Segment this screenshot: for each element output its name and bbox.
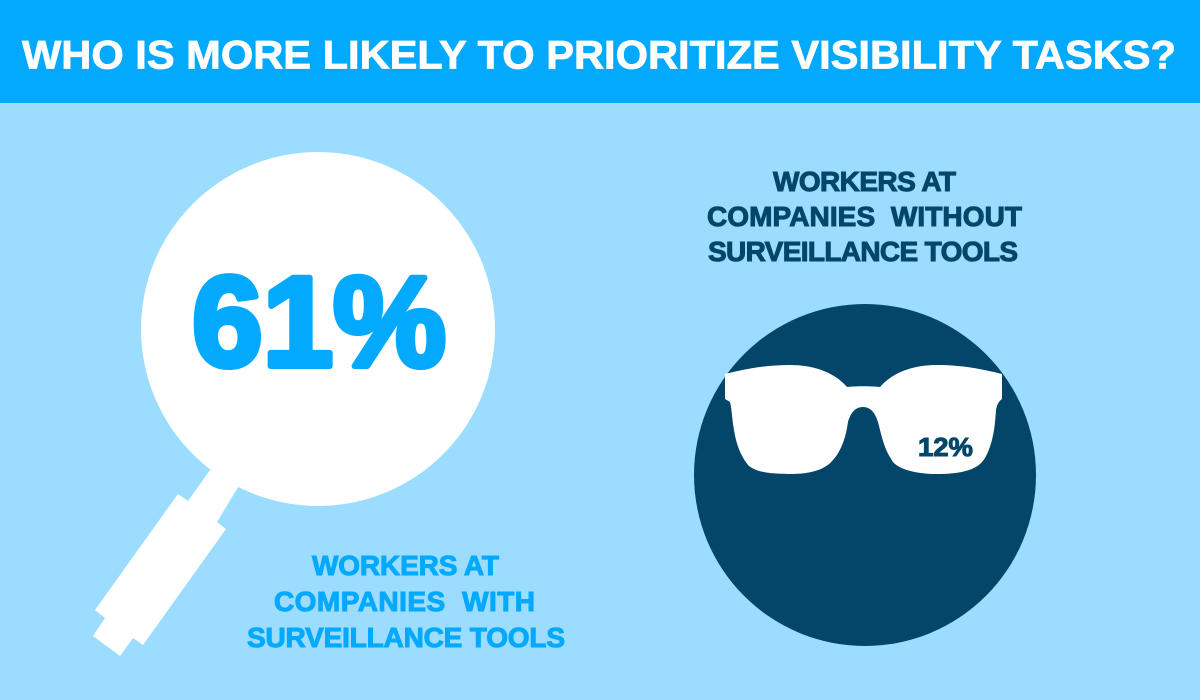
panel: workers without surveillance tools [694, 166, 1036, 646]
label: companies with surveillance tools: SURVEILLANCE TOOLS [247, 622, 565, 653]
statistic: 12%: 12% [918, 432, 973, 462]
header banner [0, 0, 1200, 103]
label: companies with surveillance tools: COMPANIES WITH [274, 586, 535, 617]
label: companies with surveillance tools [247, 550, 565, 653]
dark circle [694, 304, 1036, 646]
icon: sunglasses [725, 365, 1002, 474]
icon: magnifying glass [93, 152, 495, 656]
statistic: 61%: 61% [192, 251, 446, 394]
panel: workers with surveillance tools [93, 152, 565, 656]
label: companies without surveillance tools: COMPANIES WITHOUT [707, 201, 1022, 232]
label: companies without surveillance tools [707, 166, 1022, 267]
label: companies without surveillance tools: WORKERS AT [773, 166, 956, 197]
label: companies with surveillance tools: WORKERS AT [312, 550, 499, 581]
label: companies without surveillance tools: SURVEILLANCE TOOLS [708, 236, 1018, 267]
title: WHO IS MORE LIKELY TO PRIORITIZE VISIBILITY TASKS? [22, 34, 1176, 78]
